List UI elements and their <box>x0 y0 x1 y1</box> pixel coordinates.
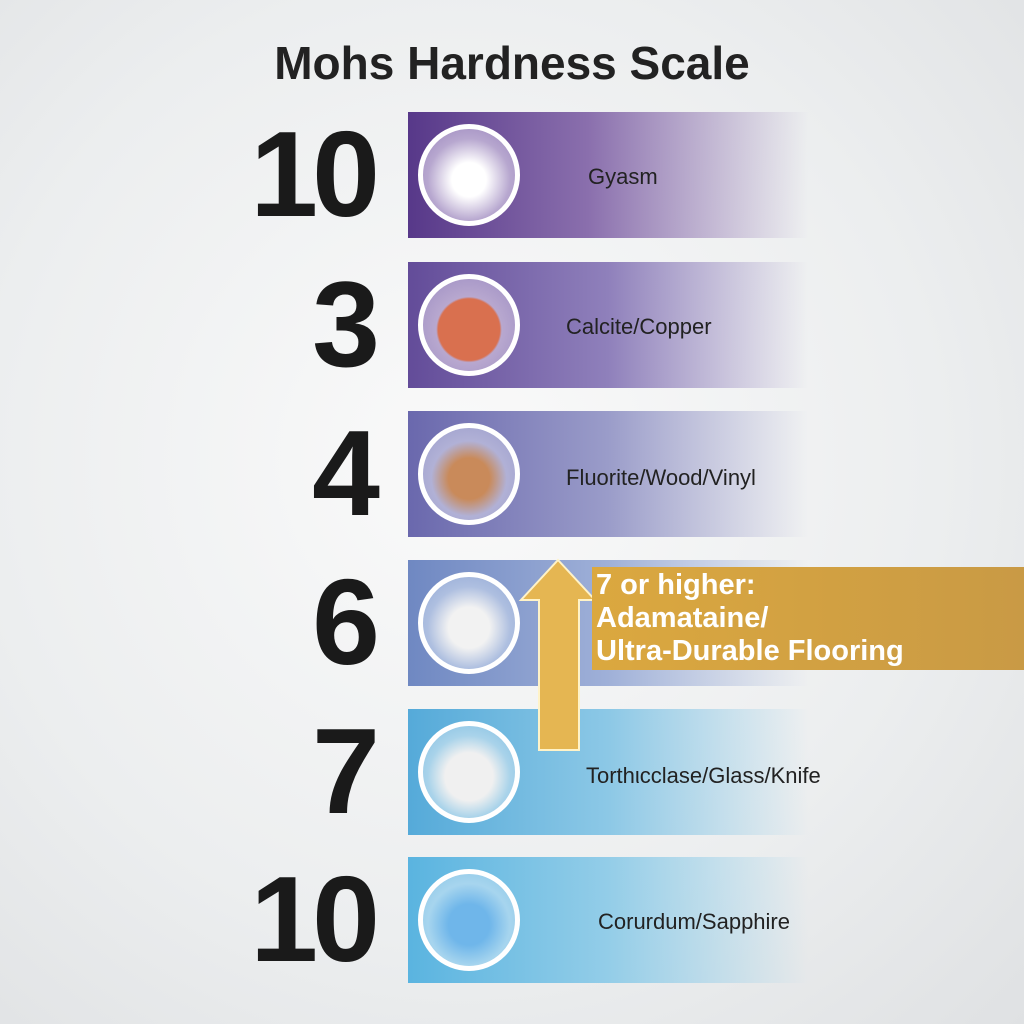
label: Torthιcclase/Glass/Knife <box>586 763 821 788</box>
icon: diamond <box>418 869 520 971</box>
row 3 <box>312 405 789 541</box>
row 6 <box>250 851 790 987</box>
icon: copper <box>418 274 520 376</box>
row 2 <box>312 256 794 392</box>
bar <box>408 112 808 238</box>
number 7: 7 <box>312 703 374 839</box>
callout <box>592 567 1024 670</box>
row 4 <box>312 554 788 690</box>
label: Gyasm <box>588 164 658 189</box>
number 10: 10 <box>250 851 374 987</box>
icon: tiles <box>418 721 520 823</box>
icon: powder <box>418 124 520 226</box>
number 6: 6 <box>312 554 374 690</box>
callout: Ultra-Durable Flooring <box>596 635 904 667</box>
arrow <box>518 558 592 751</box>
bar <box>408 709 808 835</box>
bar <box>408 262 808 388</box>
icon: glass <box>418 572 520 674</box>
bar <box>408 560 808 686</box>
label: Corurdum/Sapphire <box>598 909 790 934</box>
row 5 <box>312 703 821 839</box>
number 3: 3 <box>312 256 374 392</box>
row 1 <box>250 106 794 242</box>
icon: wood <box>418 423 520 525</box>
label: Calcite/Copper <box>566 314 712 339</box>
number 4: 4 <box>312 405 374 541</box>
callout: Adamataine/ <box>596 602 768 634</box>
callout: 7 or higher: <box>596 569 756 601</box>
bar <box>408 857 808 983</box>
label: Fluorite/Wood/Vinyl <box>566 465 756 490</box>
number 10: 10 <box>250 106 374 242</box>
bar <box>408 411 808 537</box>
title: Mohs Hardness Scale <box>274 37 750 89</box>
